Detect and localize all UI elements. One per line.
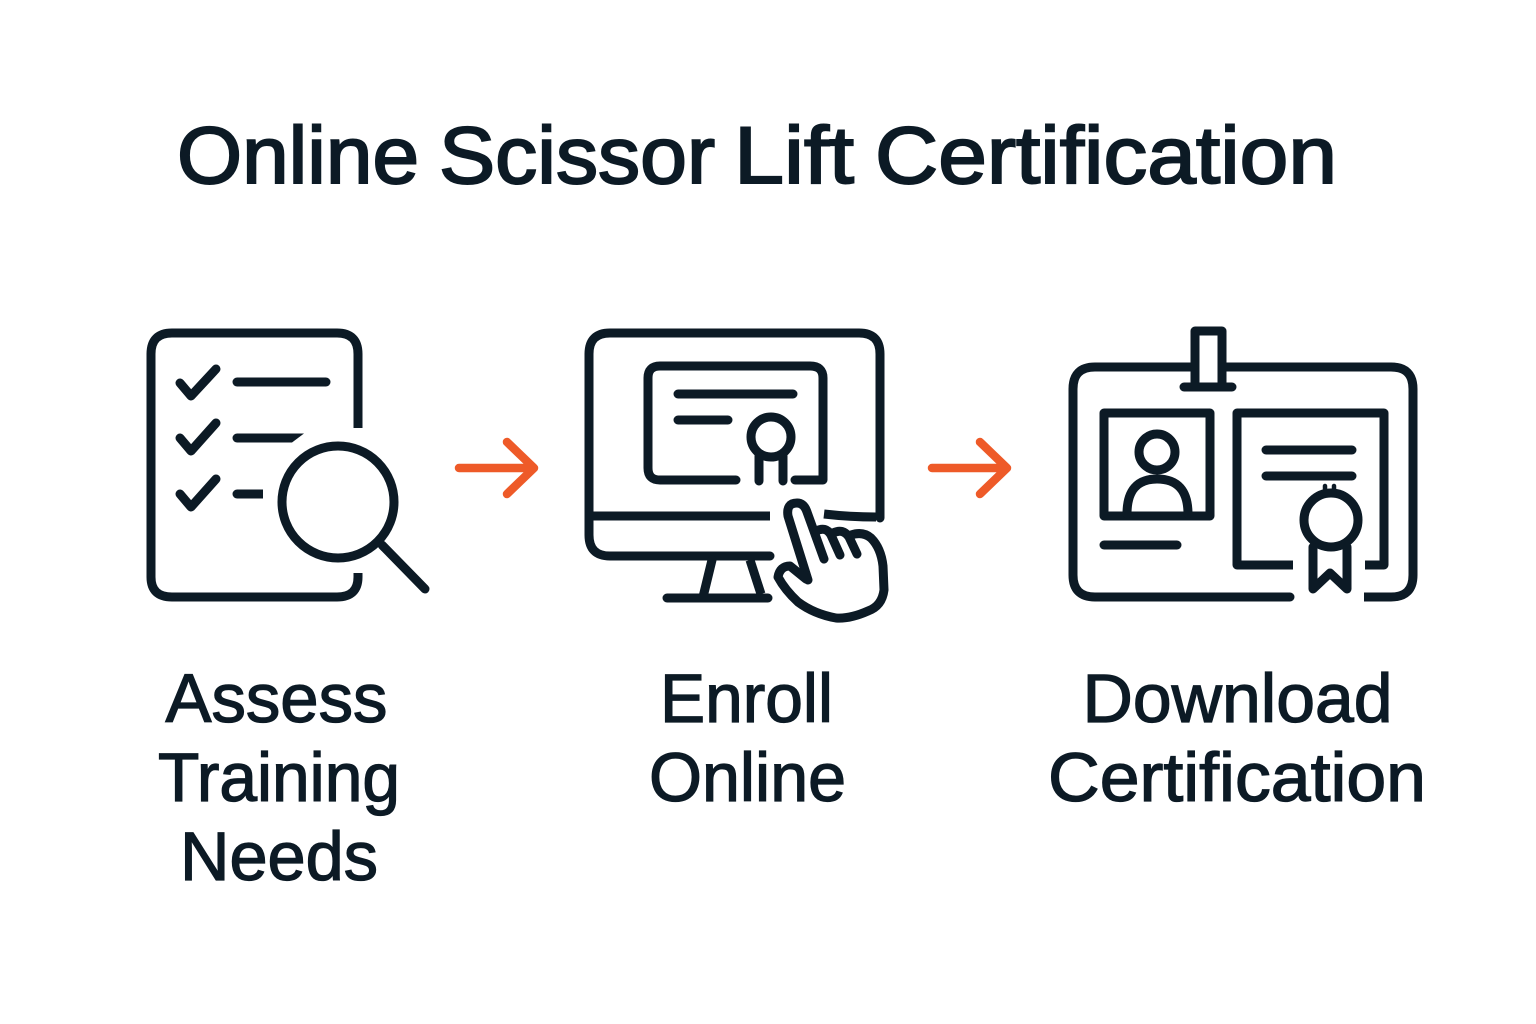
title: Lift <box>734 111 854 201</box>
icon: pointing hand <box>778 503 884 618</box>
arrow 2 <box>932 442 1007 494</box>
label: step 1: Assess <box>166 660 388 737</box>
title: Online <box>177 111 419 201</box>
label: step 2 <box>649 660 846 816</box>
icon: computer with certificate and hand <box>589 333 884 618</box>
label: step 1 <box>158 660 400 895</box>
title: Scissor <box>439 111 715 201</box>
label: step 1: Training <box>158 739 400 816</box>
title: Certification <box>875 111 1337 201</box>
label: step 3: Download <box>1082 660 1392 737</box>
arrow 1 <box>459 442 534 494</box>
label: step 3: Certification <box>1048 739 1426 816</box>
label: step 2: Online <box>649 739 846 816</box>
icon: ID badge with certificate <box>1073 331 1413 597</box>
icon: checklist with magnifier <box>151 333 425 597</box>
label: step 2: Enroll <box>660 660 833 737</box>
label: step 3 <box>1048 660 1426 816</box>
label: step 1: Needs <box>180 818 378 895</box>
